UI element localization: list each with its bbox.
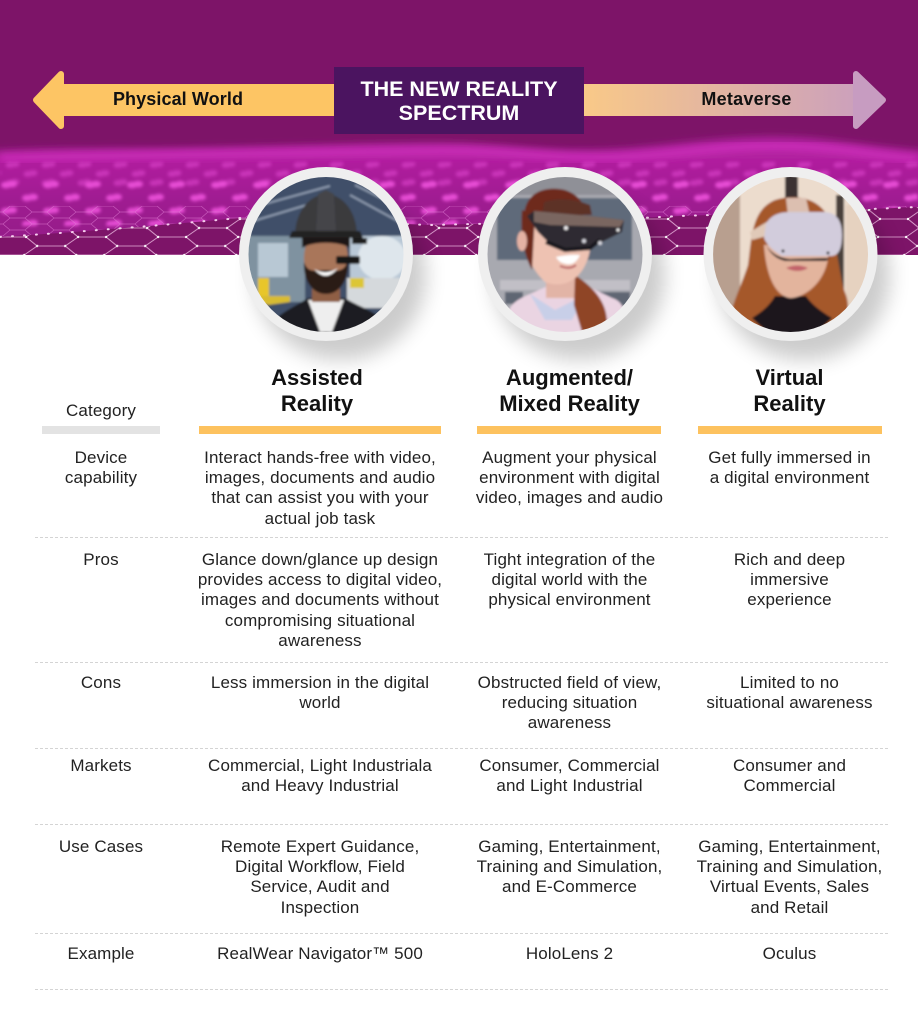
title box: THE NEW REALITY — [360, 77, 558, 101]
markets: virtual — [733, 756, 846, 795]
use cases: assisted: Inspection — [281, 898, 359, 917]
title box: SPECTRUM — [399, 101, 519, 125]
example: virtual: Oculus — [763, 944, 816, 963]
pros: augmented: Tight integration of the — [484, 550, 655, 569]
example: assisted: RealWear Navigator™ 500 — [217, 944, 423, 963]
column heading: Augmented/Mixed Reality — [499, 365, 640, 416]
device capability: assisted — [204, 448, 436, 528]
photo: augmented reality woman with headset — [478, 167, 665, 360]
markets: assisted: and Heavy Industrial — [241, 776, 399, 795]
row label: Device capability — [65, 448, 137, 487]
header banner with arrows and photos — [0, 0, 918, 368]
left arrow: Physical World — [36, 74, 334, 126]
row label: Device capability: Device — [75, 448, 127, 467]
device capability: assisted: that can assist you with your — [211, 488, 429, 507]
device capability: augmented: environment with digital — [479, 468, 660, 487]
assisted reality header bar — [199, 426, 441, 434]
device capability: virtual: Get fully immersed in — [708, 448, 871, 467]
row label: Device capability: capability — [65, 468, 137, 487]
photo: assisted reality worker with hard hat — [239, 167, 426, 360]
pros: virtual: immersive — [750, 570, 829, 589]
markets: virtual: Consumer and — [733, 756, 846, 775]
cons: augmented: Obstructed field of view, — [478, 673, 661, 692]
markets: augmented: and Light Industrial — [496, 776, 643, 795]
device capability: augmented: video, images and audio — [476, 488, 663, 507]
column heading: Virtual Reality: Virtual — [755, 365, 824, 390]
cons: augmented: awareness — [528, 713, 611, 732]
column heading: Augmented/Mixed Reality: Augmented/ — [506, 365, 633, 390]
pros: augmented: digital world with the — [492, 570, 647, 589]
photo: virtual reality woman with white headset — [704, 167, 890, 360]
right arrow: Metaverse — [584, 74, 883, 126]
title box — [334, 67, 584, 134]
markets: virtual: Commercial — [744, 776, 835, 795]
device capability: virtual — [708, 448, 871, 487]
markets: augmented: Consumer, Commercial — [479, 756, 660, 775]
hexagonal mesh wave — [0, 137, 918, 260]
pros: assisted — [198, 550, 442, 650]
category header bar — [42, 426, 160, 434]
use cases: virtual: Virtual Events, Sales — [710, 877, 869, 896]
use cases: assisted: Digital Workflow, Field — [235, 857, 405, 876]
use cases: assisted: Remote Expert Guidance, — [221, 837, 419, 856]
column heading: Assisted Reality: Assisted — [271, 365, 363, 390]
right arrow: Metaverse: Metaverse — [701, 89, 792, 109]
device capability: assisted: images, documents and audio — [205, 468, 435, 487]
use cases: augmented: Training and Simulation, — [477, 857, 662, 876]
cons: virtual: Limited to no — [740, 673, 839, 692]
device capability: assisted: actual job task — [265, 509, 375, 528]
markets: assisted — [208, 756, 432, 795]
virtual reality header bar — [698, 426, 882, 434]
augmented reality header bar — [477, 426, 661, 434]
pros: assisted: Glance down/glance up design — [202, 550, 438, 569]
column heading: Assisted Reality: Reality — [281, 391, 353, 416]
column heading: Category: Category — [66, 401, 136, 420]
use cases: augmented — [477, 837, 662, 896]
left arrow: Physical World: Physical World — [113, 89, 243, 109]
column heading: Assisted Reality — [271, 365, 363, 416]
use cases: virtual: Gaming, Entertainment, — [698, 837, 881, 856]
row label: Cons: Cons — [81, 673, 121, 692]
cons: virtual — [706, 673, 873, 712]
use cases: virtual — [697, 837, 882, 917]
purple background — [0, 0, 918, 255]
column heading: Virtual Reality — [753, 365, 826, 416]
pros: assisted: images and documents without — [201, 590, 439, 609]
markets: assisted: Commercial, Light Industriala — [208, 756, 432, 775]
use cases: assisted: Service, Audit and — [250, 877, 390, 896]
cons: assisted: Less immersion in the digital — [211, 673, 429, 692]
pros: assisted: awareness — [278, 631, 362, 650]
use cases: virtual: and Retail — [751, 898, 828, 917]
pros: augmented — [484, 550, 655, 609]
pros: virtual: experience — [747, 590, 832, 609]
use cases: augmented: Gaming, Entertainment, — [478, 837, 661, 856]
use cases: virtual: Training and Simulation, — [697, 857, 882, 876]
cons: augmented: reducing situation — [502, 693, 637, 712]
pros: augmented: physical environment — [488, 590, 651, 609]
row label: Pros: Pros — [83, 550, 119, 569]
device capability: augmented: Augment your physical — [482, 448, 657, 467]
row label: Use Cases: Use Cases — [59, 837, 143, 856]
row label: Markets: Markets — [70, 756, 132, 775]
cons: assisted — [211, 673, 429, 712]
cons: virtual: situational awareness — [706, 693, 873, 712]
example: augmented: HoloLens 2 — [526, 944, 613, 963]
device capability: virtual: a digital environment — [710, 468, 869, 487]
pros: virtual — [734, 550, 845, 609]
column heading: Virtual Reality: Reality — [753, 391, 826, 416]
use cases: assisted — [221, 837, 419, 917]
device capability: augmented — [476, 448, 663, 507]
column heading: Augmented/Mixed Reality: Mixed Reality — [499, 391, 640, 416]
cons: augmented — [478, 673, 661, 732]
row label: Example: Example — [67, 944, 135, 963]
use cases: augmented: and E-Commerce — [502, 877, 637, 896]
pros: assisted: compromising situational — [225, 611, 415, 630]
markets: augmented — [479, 756, 660, 795]
pros: virtual: Rich and deep — [734, 550, 845, 569]
cons: assisted: world — [299, 693, 341, 712]
pros: assisted: provides access to digital video, — [198, 570, 442, 589]
device capability: assisted: Interact hands-free with video, — [204, 448, 436, 467]
